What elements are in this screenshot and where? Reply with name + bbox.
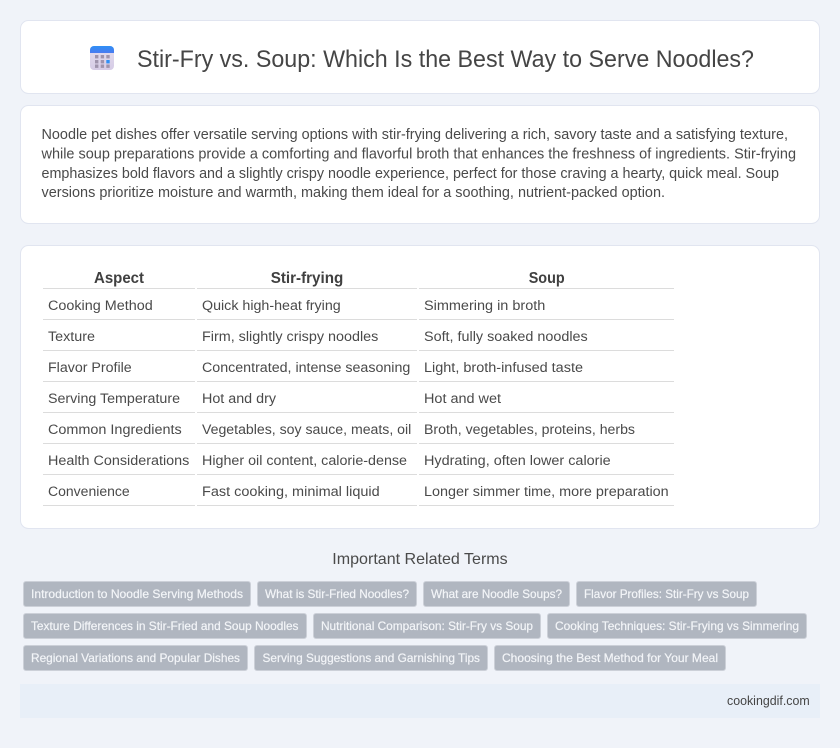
text block: introduction paragraph: emphasizes bold flavors and a slightly crispy noodle experience, perfect for those craving a hearty, quick meal. Soup	[42, 166, 779, 182]
table row: texture: Soft, fully soaked noodles	[424, 329, 588, 345]
tag: What is Stir-Fried Noodles?	[265, 587, 409, 601]
panel: introduction	[20, 106, 820, 224]
table row: serving temperature: Serving Temperature	[48, 391, 180, 407]
text block: introduction paragraph	[40, 127, 796, 201]
footer: cookingdif.com	[727, 693, 810, 708]
tag: Texture Differences in Stir-Fried and Soup Noodles	[31, 619, 298, 633]
table row: convenience: Convenience	[48, 484, 130, 500]
table row: health considerations: Higher oil content, calorie-dense	[202, 453, 407, 469]
tag	[494, 646, 726, 670]
table row: health considerations	[48, 453, 611, 469]
tag: Nutritional Comparison: Stir-Fry vs Soup	[321, 619, 533, 633]
tag: Regional Variations and Popular Dishes	[31, 651, 240, 665]
table row: convenience: Fast cooking, minimal liquid	[202, 484, 380, 500]
tag	[258, 582, 416, 606]
table row: flavor profile: Light, broth-infused taste	[424, 360, 583, 376]
table row: texture: Firm, slightly crispy noodles	[202, 329, 378, 345]
panel: comparison table	[20, 246, 820, 528]
tag	[254, 646, 488, 670]
tag	[24, 582, 250, 606]
table row: cooking method	[48, 298, 545, 314]
tag: Cooking Techniques: Stir-Frying vs Simmering	[555, 619, 799, 633]
heading: important related terms: Important Related Terms	[332, 551, 508, 568]
table header row: Stir-frying	[271, 270, 343, 287]
text block: introduction paragraph: versions prioritize moisture and warmth, making them ideal for a soothing, nutrient-packed option.	[42, 185, 665, 201]
table row: cooking method: Cooking Method	[48, 298, 153, 314]
tag	[548, 614, 806, 638]
table row: flavor profile: Flavor Profile	[48, 360, 132, 376]
table row: health considerations: Health Considerations	[48, 453, 189, 469]
title: Stir-Fry vs. Soup: Which Is the Best Way to Serve Noodles?	[137, 46, 754, 73]
tag	[576, 582, 756, 606]
tag	[314, 614, 540, 638]
table header row: Aspect	[94, 270, 145, 287]
tag: What are Noodle Soups?	[431, 587, 562, 601]
table row: texture: Texture	[48, 329, 95, 345]
table row: common ingredients: Broth, vegetables, proteins, herbs	[424, 422, 635, 438]
icon: calendar	[90, 46, 114, 70]
tag	[424, 582, 570, 606]
table row: serving temperature: Hot and dry	[202, 391, 277, 407]
table row: health considerations: Hydrating, often lower calorie	[424, 453, 611, 469]
table header row	[94, 270, 565, 287]
tag: Flavor Profiles: Stir-Fry vs Soup	[584, 587, 749, 601]
table row: serving temperature	[48, 391, 501, 407]
table header row: Soup	[529, 270, 565, 287]
table row: common ingredients: Common Ingredients	[48, 422, 182, 438]
tag	[24, 614, 306, 638]
tag: Introduction to Noodle Serving Methods	[31, 587, 243, 601]
table row: common ingredients: Vegetables, soy sauce, meats, oil	[202, 422, 411, 438]
text block: introduction paragraph: Noodle pet dishes offer versatile serving options with stir-frying delivering a rich, savory taste and a satisfying texture,	[42, 127, 788, 143]
panel: header	[20, 20, 820, 94]
table row: flavor profile: Concentrated, intense seasoning	[202, 360, 410, 376]
table row: flavor profile	[48, 360, 583, 376]
table row: texture	[48, 329, 588, 345]
table row: cooking method: Simmering in broth	[424, 298, 545, 314]
tag: Serving Suggestions and Garnishing Tips	[262, 651, 480, 665]
related terms tags	[24, 582, 806, 670]
footer	[20, 684, 820, 718]
table row: convenience	[48, 484, 669, 500]
table row: common ingredients	[48, 422, 635, 438]
table row: convenience: Longer simmer time, more preparation	[424, 484, 669, 500]
table row: serving temperature: Hot and wet	[424, 391, 501, 407]
tag	[24, 646, 248, 670]
tag: Choosing the Best Method for Your Meal	[502, 651, 718, 665]
table row: cooking method: Quick high-heat frying	[202, 298, 341, 314]
text block: introduction paragraph: while soup preparations provide a comforting and flavorful broth that enhances the freshness of ingredients. Stir-frying	[40, 146, 796, 162]
